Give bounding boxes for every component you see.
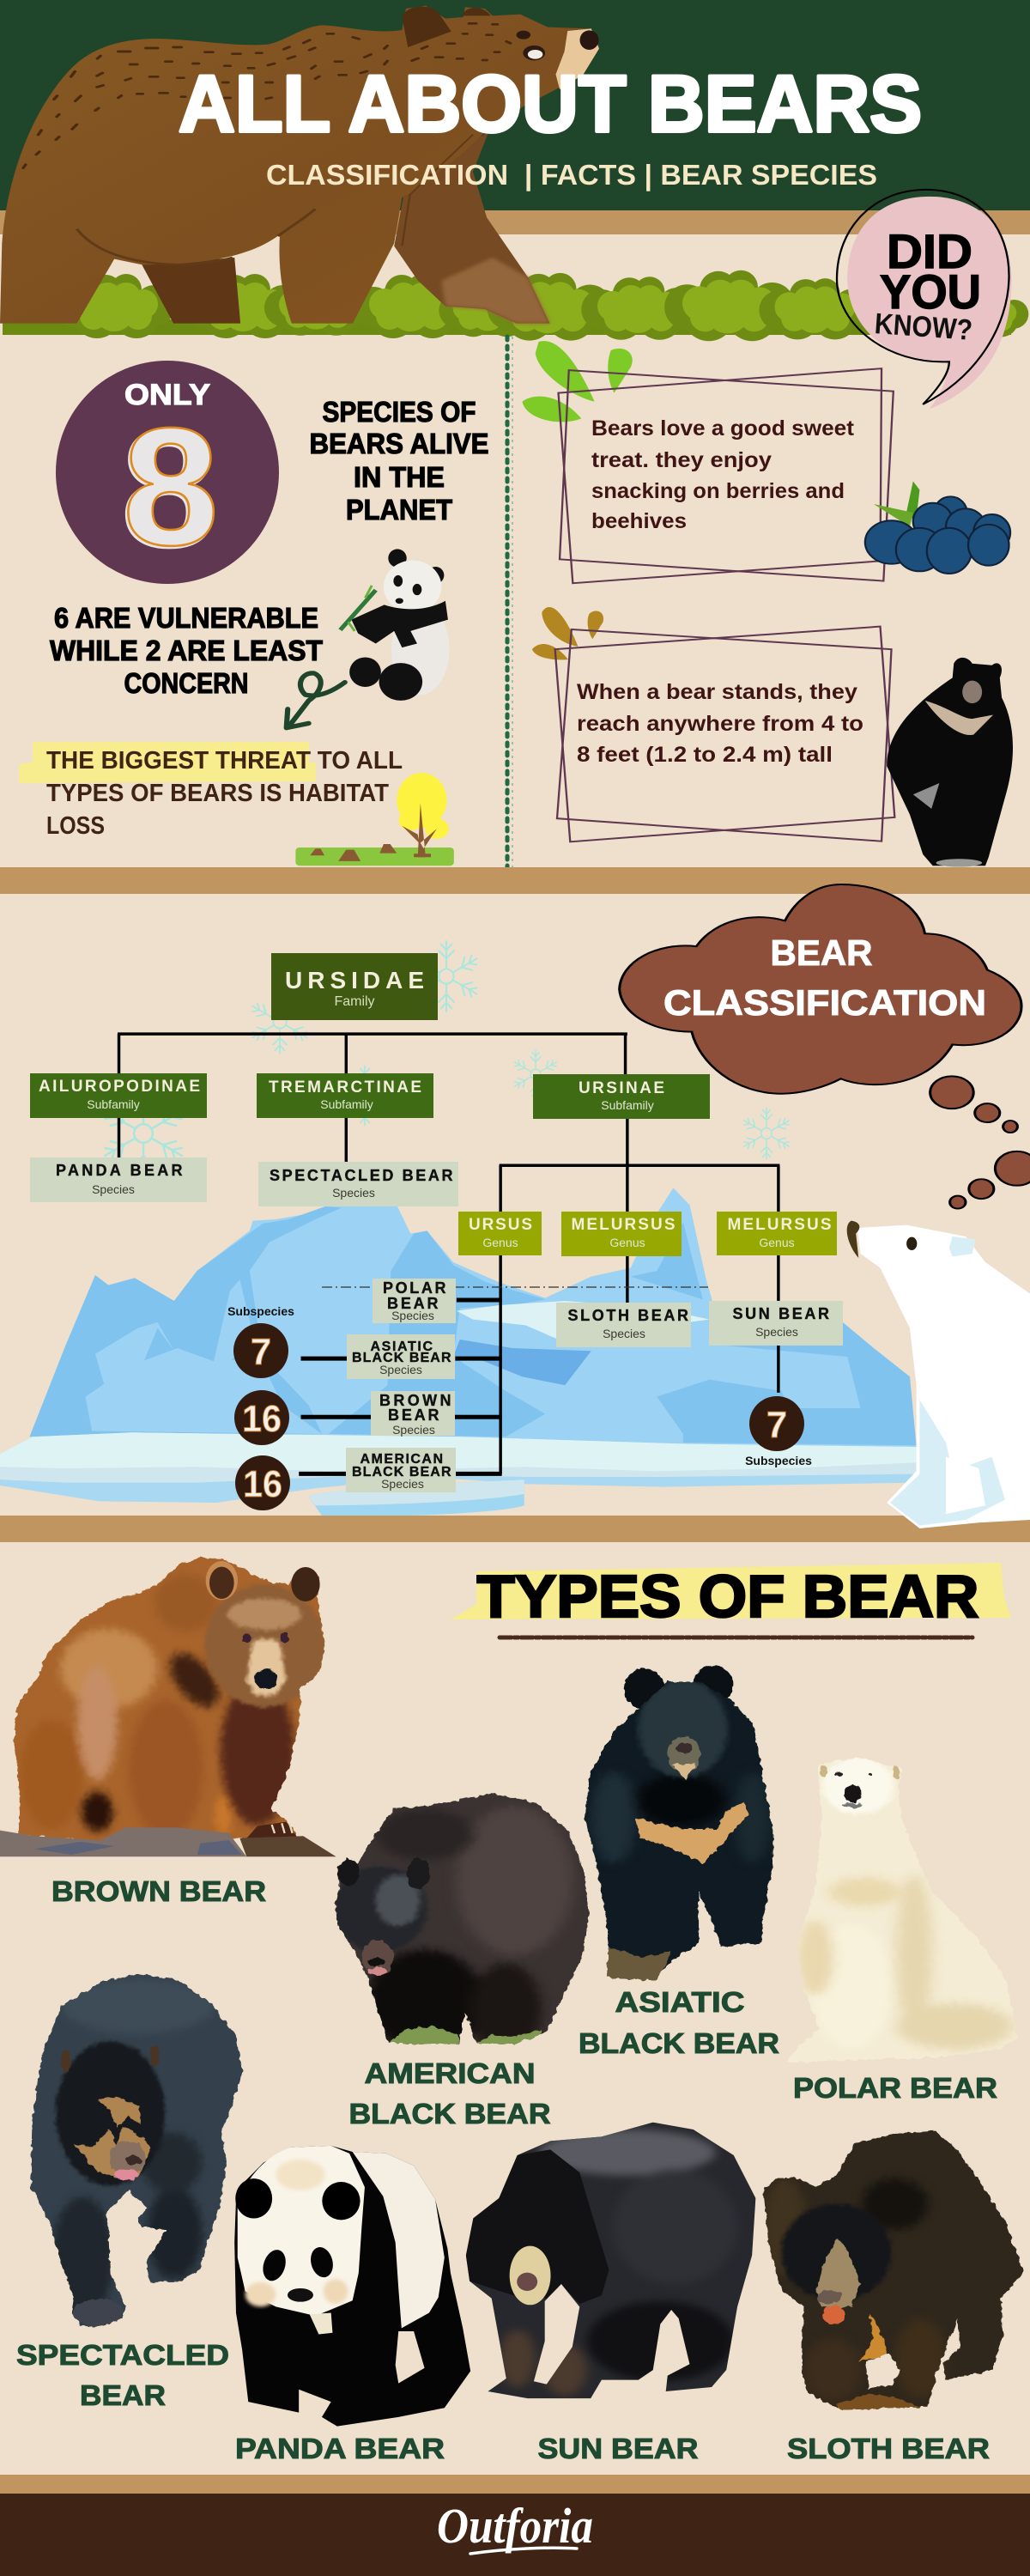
box: sun bear species: Species [755,1325,798,1339]
badge: 16 subspecies american [235,1455,290,1510]
text: species alive: SPECIES OF [323,396,476,428]
badge: 7 subspecies sun bear: 7 [766,1404,787,1446]
text: biggest threat: LOSS [46,812,105,840]
box: ailuropodinae subfamily: AILUROPODINAE [39,1078,200,1096]
text: biggest threat [19,742,403,840]
box: ailuropodinae subfamily: Subfamily [87,1097,140,1111]
panel: did you know facts [522,190,1013,867]
section band: facts to classification [0,867,1030,894]
bear: american black bear: AMERICAN [364,2057,536,2089]
text: conservation status: WHILE 2 ARE LEAST [50,635,323,666]
bear: sloth bear [762,2129,1023,2459]
panel: header [0,0,1030,341]
box: ursidae family: Family [334,994,375,1009]
text: species alive [309,396,489,526]
callout: thought cloud heading: CLASSIFICATION [663,982,986,1023]
text: biggest threat: THE BIGGEST THREAT TO ALL [46,747,403,775]
badge: 16 subspecies brown [234,1390,289,1445]
box: brown bear species [371,1391,455,1437]
subtitle: CLASSIFICATION | FACTS | BEAR SPECIES [266,159,877,191]
decoration: snowflakes [99,940,792,1179]
callout: did you know [837,190,1012,409]
frame: standing height fact [555,627,894,841]
frame: sweet treat fact: treat. they enjoy [591,448,772,472]
box: asiatic black bear species: Species [379,1363,422,1376]
stat circle: only 8 [56,361,279,584]
bear: polar bear: POLAR BEAR [793,2072,997,2104]
box: tremarctinae subfamily [257,1073,433,1118]
icon: tree and cleared land [295,773,454,866]
panel: key numbers [19,361,489,866]
text: species alive: IN THE [354,461,445,493]
logo: outforia: Outforia [437,2498,593,2554]
box: ursus genus [458,1212,542,1255]
box: sloth bear species: SLOTH BEAR [568,1307,688,1324]
bear: asiatic black bear: ASIATIC [615,1986,745,2018]
text: species alive: PLANET [346,494,452,526]
icon: ochre leaves [532,607,603,659]
box: asiatic black bear species: BLACK BEAR [352,1351,451,1365]
icon: sitting panda [340,549,449,701]
text: conservation status [50,602,323,699]
panel: bear classification [0,884,1030,1516]
text: conservation status: 6 ARE VULNERABLE [54,602,318,634]
stat circle: only 8: 8 [121,395,217,582]
badge: 16 subspecies brown: 16 [242,1398,282,1440]
bear: sun bear [465,2123,755,2459]
box: american black bear species: BLACK BEAR [352,1465,451,1479]
bear: sun bear: SUN BEAR [537,2433,699,2464]
box: ursidae family [271,953,438,1020]
line: dashed iceberg waterline [322,1286,708,1288]
box: melursus genus second: MELURSUS [728,1216,831,1234]
bear: american black bear [335,1793,590,2124]
box: brown bear species: Species [392,1423,435,1437]
box: ailuropodinae subfamily [30,1073,207,1118]
box: polar bear species: Species [391,1309,434,1322]
callout: did you know: YOU [880,264,981,319]
box: tremarctinae subfamily: Subfamily [320,1097,373,1111]
badge: 7 subspecies sun bear [749,1396,804,1451]
box: spectacled bear species: SPECTACLED BEAR [270,1167,453,1184]
divider: dotted vertical [507,337,512,867]
icon: blueberries [865,481,1010,574]
title: ALL ABOUT BEARS [179,58,922,149]
callout: thought cloud heading [620,884,1030,1209]
box: panda bear species: PANDA BEAR [56,1162,183,1179]
box: sloth bear species [556,1303,691,1347]
box: asiatic black bear species: ASIATIC [371,1340,433,1354]
callout: did you know: KNOW? [874,307,973,347]
frame: standing height fact: reach anywhere from 4 to [577,712,863,736]
box: polar bear species: POLAR [383,1279,446,1297]
icon: standing black bear [887,658,1013,867]
box: sloth bear species: Species [603,1327,645,1340]
bear: spectacled bear: SPECTACLED [16,2339,229,2371]
box: american black bear species: Species [381,1477,424,1491]
box: melursus genus second [717,1212,837,1255]
illustration: walking brown bear [0,6,599,324]
bear: panda bear: PANDA BEAR [235,2433,445,2464]
frame: standing height fact: 8 feet (1.2 to 2.4 m) tall [577,743,833,767]
badge: 7 subspecies polar [233,1323,288,1378]
box: sun bear species: SUN BEAR [733,1305,829,1322]
box: ursus genus: Genus [482,1236,518,1249]
bear: panda bear [234,2146,470,2464]
frame: standing height fact: When a bear stands, they [577,680,857,704]
box: ursinae subfamily [533,1074,710,1119]
label: subspecies right: Subspecies [745,1454,812,1467]
callout: thought cloud heading: BEAR [771,933,872,973]
box: spectacled bear species: Species [332,1186,375,1200]
illustration: iceberg [0,1188,917,1516]
box: ursinae subfamily: URSINAE [579,1079,664,1097]
bear: sloth bear: SLOTH BEAR [787,2433,990,2464]
frame: sweet treat fact: beehives [591,509,687,533]
frame: sweet treat fact [559,368,894,583]
callout: did you know: DID [887,224,972,278]
bear: spectacled bear: BEAR [80,2379,166,2411]
box: melursus genus [561,1212,682,1256]
bear: brown bear [0,1546,343,1907]
panel: footer [0,2475,1030,2576]
bear: asiatic black bear: BLACK BEAR [579,2027,779,2059]
box: ursidae family: URSIDAE [285,967,424,993]
box: melursus genus: MELURSUS [572,1216,675,1234]
bear: american black bear: BLACK BEAR [348,2098,551,2129]
box: tremarctinae subfamily: TREMARCTINAE [269,1078,421,1097]
box: sun bear species [709,1301,843,1346]
box: melursus genus second: Genus [759,1236,795,1249]
bear: brown bear: BROWN BEAR [52,1875,266,1907]
box: melursus genus: Genus [609,1236,645,1249]
box: polar bear species [373,1279,456,1323]
box: ursus genus: URSUS [469,1216,532,1234]
box: panda bear species [30,1157,207,1202]
arrow: curly down arrow [287,673,345,728]
illustration: polar bear [847,1221,1030,1528]
bear: asiatic black bear [580,1665,779,2054]
bear: polar bear [787,1757,1018,2099]
bushes [3,270,1028,341]
box: panda bear species: Species [92,1182,135,1196]
frame: sweet treat fact: Bears love a good sweet [591,416,855,440]
section band: classification to types [0,1516,1030,1542]
box: american black bear species: AMERICAN [360,1452,443,1467]
stat circle: only 8: 8 [123,393,219,580]
box: brown bear species: BEAR [388,1406,439,1424]
frame: sweet treat fact: snacking on berries and [591,479,845,503]
stat circle: only 8: ONLY [124,379,210,411]
panel: types of bear [0,1546,1030,2464]
text: biggest threat: TYPES OF BEARS IS HABITAT [46,780,389,807]
badge: 16 subspecies american: 16 [243,1463,282,1505]
text: conservation status: CONCERN [124,667,249,699]
icon: green leaves [522,341,633,422]
box: asiatic black bear species [347,1334,455,1379]
box: ursinae subfamily: Subfamily [601,1098,654,1112]
box: brown bear species: BROWN [379,1392,451,1409]
box: spectacled bear species [258,1162,458,1206]
heading: types of bear: TYPES OF BEAR [477,1563,978,1630]
box: polar bear species: BEAR [387,1295,439,1312]
chart: connector lines [118,1034,779,1473]
bear: spectacled bear [16,1973,244,2406]
label: subspecies left: Subspecies [227,1304,294,1318]
text: species alive: BEARS ALIVE [309,428,489,459]
badge: 7 subspecies polar: 7 [251,1331,271,1373]
box: american black bear species [346,1448,456,1492]
